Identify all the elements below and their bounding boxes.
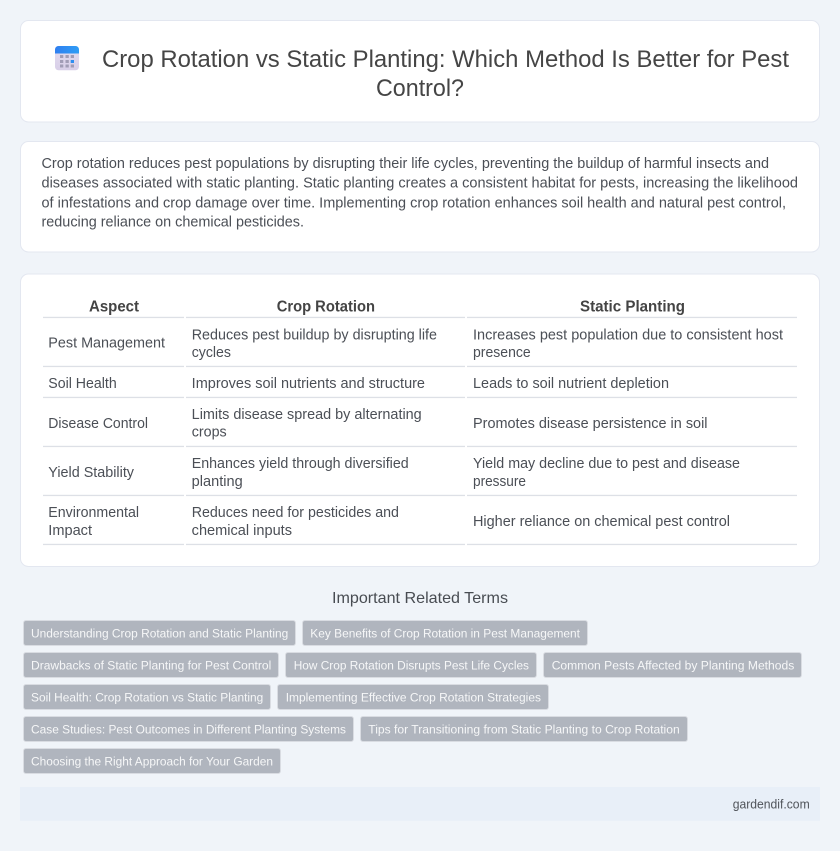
- row: environmental impact: Environmental: [48, 505, 139, 521]
- footer: [20, 787, 820, 821]
- row: pest management: cycles: [192, 345, 231, 361]
- icon: calendar: [55, 46, 79, 70]
- heading: important related terms: Important Related Terms: [332, 590, 508, 607]
- tag: [24, 652, 278, 678]
- row: pest management: Pest Management: [48, 336, 165, 352]
- row: yield stability: planting: [192, 474, 243, 490]
- row: environmental impact: Reduces need for pesticides and: [192, 505, 399, 521]
- tag: Understanding Crop Rotation and Static Planting: [31, 626, 288, 640]
- tag: [286, 652, 536, 678]
- row: yield stability: Yield Stability: [48, 465, 135, 481]
- row: environmental impact: [48, 505, 730, 539]
- row: soil health: Soil Health: [48, 376, 117, 392]
- tag: Common Pests Affected by Planting Methods: [552, 658, 794, 672]
- row: soil health: Leads to soil nutrient depletion: [473, 376, 669, 392]
- row: yield stability: pressure: [473, 474, 526, 490]
- tag: Choosing the Right Approach for Your Garden: [31, 754, 273, 768]
- table header: Crop Rotation: [277, 299, 375, 316]
- table header: Aspect: [89, 299, 139, 316]
- tag: [360, 716, 688, 742]
- tag: Soil Health: Crop Rotation vs Static Planting: [31, 690, 263, 704]
- tag: [24, 620, 296, 646]
- title: Crop Rotation vs Static Planting: Which Method Is Better for Pest: [102, 46, 789, 73]
- row: environmental impact: Impact: [48, 523, 92, 539]
- panel: summary paragraph: diseases associated with static planting. Static planting creates a consistent habitat for pests, increasing the likelihood: [42, 176, 798, 192]
- tag: [302, 620, 588, 646]
- tag: Drawbacks of Static Planting for Pest Control: [31, 658, 271, 672]
- table header: [89, 299, 685, 316]
- tag: [24, 716, 354, 742]
- row: disease control: Limits disease spread by alternating: [192, 407, 422, 423]
- tag: Key Benefits of Crop Rotation in Pest Management: [310, 626, 581, 640]
- row: yield stability: Yield may decline due to pest and disease: [473, 456, 740, 472]
- tag: How Crop Rotation Disrupts Pest Life Cycles: [294, 658, 529, 672]
- row: disease control: Disease Control: [48, 416, 148, 432]
- row: environmental impact: Higher reliance on chemical pest control: [473, 514, 730, 530]
- panel: related term tags: [24, 620, 802, 774]
- tag: [278, 684, 548, 710]
- panel: summary paragraph: reducing reliance on chemical pesticides.: [42, 215, 304, 231]
- panel: title card: [20, 20, 820, 122]
- tag: Tips for Transitioning from Static Planting to Crop Rotation: [368, 722, 680, 736]
- row: pest management: Increases pest population due to consistent host: [473, 327, 783, 343]
- tag: [544, 652, 802, 678]
- row: environmental impact: chemical inputs: [192, 523, 292, 539]
- row: soil health: [48, 376, 669, 392]
- row: pest management: Reduces pest buildup by disrupting life: [192, 327, 437, 343]
- tag: Implementing Effective Crop Rotation Strategies: [286, 690, 541, 704]
- panel: summary paragraph: [20, 142, 820, 252]
- panel: summary paragraph: Crop rotation reduces pest populations by disrupting their life cycles, preventing the buildup of harmful insects and: [42, 156, 769, 172]
- tag: [24, 684, 270, 710]
- row: yield stability: [48, 456, 740, 490]
- row: soil health: Improves soil nutrients and structure: [192, 376, 425, 392]
- title: [102, 46, 789, 102]
- footer: gardendif.com: [733, 796, 810, 811]
- row: yield stability: Enhances yield through diversified: [192, 456, 409, 472]
- row: disease control: crops: [192, 425, 227, 441]
- panel: summary paragraph: of infestations and crop damage over time. Implementing crop rotation enhances soil health and natural pest control,: [42, 195, 786, 211]
- row: disease control: [48, 407, 708, 441]
- row: pest management: presence: [473, 345, 531, 361]
- panel: comparison table: [20, 274, 820, 566]
- row: disease control: Promotes disease persistence in soil: [473, 416, 708, 432]
- row: pest management: [48, 327, 783, 361]
- tag: Case Studies: Pest Outcomes in Different Planting Systems: [31, 722, 346, 736]
- table header: Static Planting: [580, 299, 685, 316]
- title: Control?: [376, 75, 464, 102]
- tag: [24, 748, 280, 774]
